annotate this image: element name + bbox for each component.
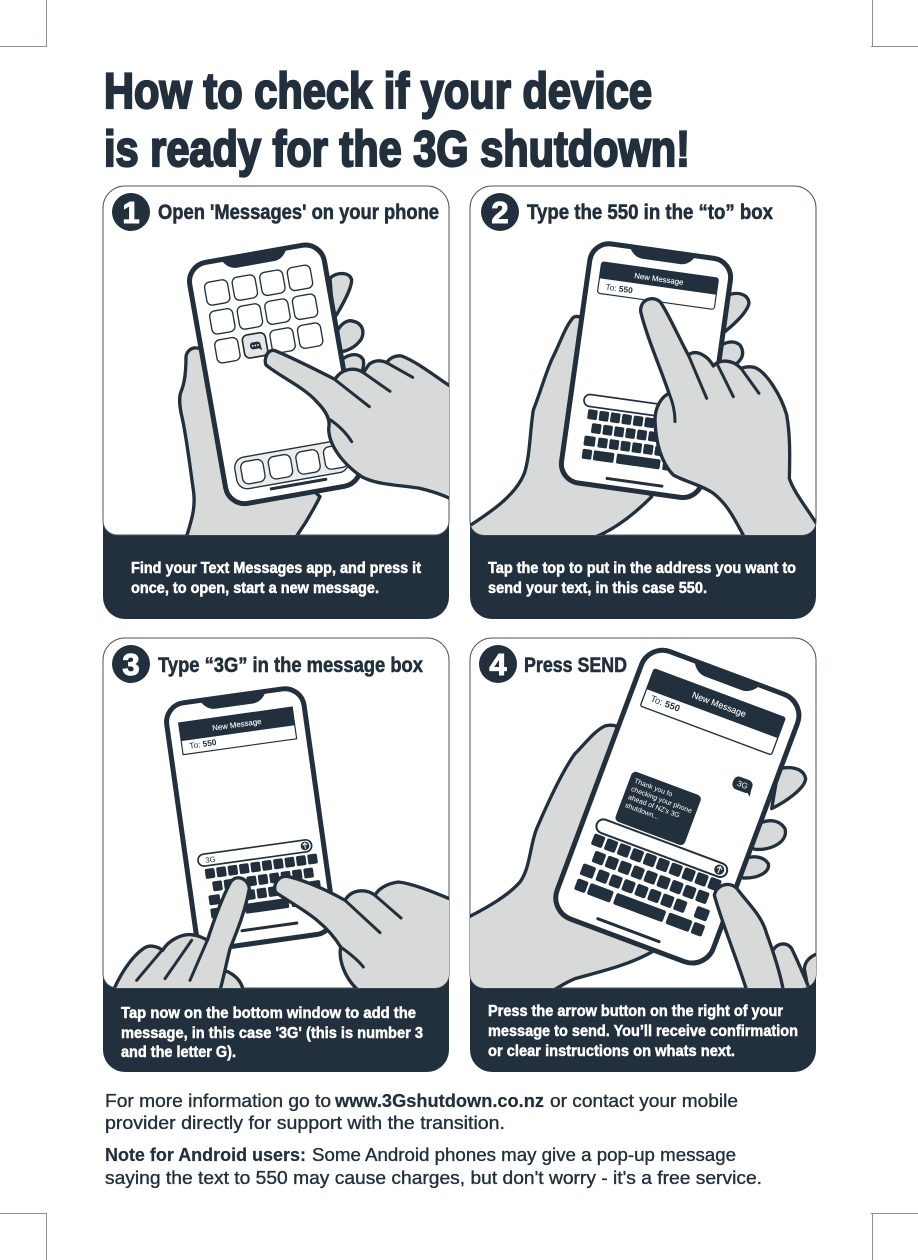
reply bubble: ahead of NZ's 3G	[627, 794, 680, 820]
step 4 description: or clear instructions on whats next.	[488, 1043, 735, 1060]
reply bubble: Thank you fo	[633, 778, 673, 799]
step 3 description	[121, 1005, 423, 1061]
panel: step 3	[103, 638, 453, 1072]
illustration: finger tapping to field	[468, 241, 818, 538]
step 2 number badge	[481, 193, 519, 231]
step 2 description: Tap the top to put in the address you want to	[488, 560, 796, 577]
illustration: hand tapping messages app	[180, 242, 453, 538]
left typing hand	[113, 878, 249, 990]
step 3 description: Tap now on the bottom window to add the	[121, 1005, 416, 1022]
illustration: pressing send	[467, 644, 818, 990]
reply bubble: checking your phone	[630, 786, 693, 815]
footer: note for Android users	[105, 1144, 762, 1188]
app dock	[233, 439, 350, 490]
reply bubble: shutdown...	[624, 802, 660, 821]
illustration: typing 3G	[113, 686, 453, 990]
step 2 number badge: 2	[491, 195, 509, 230]
to field: To: 550	[649, 694, 681, 714]
to field: New Message	[212, 717, 262, 733]
step 4 description	[488, 1003, 798, 1060]
step 2 description	[488, 560, 796, 597]
step 1 number badge	[112, 193, 150, 231]
to field	[640, 669, 785, 755]
to field: To: 550	[189, 737, 217, 751]
step 3 description: message, in this case '3G' (this is number 3	[121, 1025, 423, 1042]
to field: To: 550	[605, 282, 634, 295]
sent 3G bubble: 3G	[736, 779, 749, 791]
panel: step 1	[103, 186, 453, 619]
title	[104, 63, 690, 177]
step 3 number badge: 3	[122, 647, 140, 682]
message input with 3G	[197, 839, 312, 867]
panel 1 white card	[103, 186, 449, 535]
step 1 description: once, to open, start a new message.	[131, 580, 379, 597]
to field	[597, 262, 719, 310]
step 2 description: send your text, in this case 550.	[488, 580, 707, 597]
footer: more information: or contact your mobile	[550, 1090, 738, 1111]
step 4 number badge	[479, 645, 517, 683]
footer: note for Android users: saying the text to 550 may cause charges, but don't worry - it's a free service.	[105, 1167, 762, 1188]
footer: note for Android users: Note for Android users:	[105, 1144, 306, 1165]
message input with send arrow	[594, 817, 729, 879]
step 4 description: message to send. You’ll receive confirmation	[488, 1023, 798, 1040]
panel 4 background	[470, 638, 816, 1072]
holding hand	[467, 725, 806, 990]
panel 3 background	[103, 638, 449, 1072]
phone	[186, 242, 364, 507]
step 1 description	[131, 560, 421, 597]
right typing hand	[275, 876, 453, 990]
tapping hand	[265, 350, 453, 500]
footer: more information: www.3Gshutdown.co.nz	[334, 1090, 544, 1111]
to field	[179, 707, 297, 755]
pressing hand	[714, 884, 818, 990]
sent 3G bubble	[732, 776, 753, 797]
panel 2 background	[470, 186, 816, 619]
message input with 3G: 3G	[205, 855, 216, 865]
step 3 description: and the letter G).	[121, 1044, 236, 1061]
phone	[559, 241, 733, 500]
title: How to check if your device	[104, 63, 652, 119]
phone	[164, 686, 336, 951]
step 4 number badge: 4	[489, 647, 507, 682]
step 4 description: Press the arrow button on the right of your	[488, 1003, 783, 1020]
step 3 number badge	[112, 645, 150, 683]
step 1 heading: Open 'Messages' on your phone	[158, 201, 439, 224]
panel 3 white card	[103, 638, 449, 988]
title: is ready for the 3G shutdown!	[104, 121, 690, 177]
panel 4 white card	[470, 638, 816, 988]
to field: New Message	[691, 690, 748, 719]
footer: note for Android users: Some Android phones may give a pop-up message	[312, 1144, 736, 1165]
icon: messages app	[241, 332, 269, 359]
footer: more information: provider directly for support with the transition.	[105, 1112, 505, 1133]
step 2 heading: Type the 550 in the “to” box	[527, 201, 773, 224]
holding hand	[180, 274, 364, 538]
step 4 heading: Press SEND	[524, 654, 627, 677]
phone	[549, 644, 805, 969]
footer: more information: For more information go to	[105, 1090, 331, 1111]
panel 1 background	[103, 186, 449, 619]
step 1 number badge: 1	[122, 195, 140, 230]
step 3 heading: Type “3G” in the message box	[158, 654, 423, 677]
to field: New Message	[634, 271, 684, 287]
tapping hand	[641, 299, 818, 538]
step 1 description: Find your Text Messages app, and press it	[131, 560, 421, 577]
panel: step 4	[467, 638, 818, 1072]
holding hand	[468, 293, 749, 538]
reply bubble	[614, 770, 702, 846]
footer: more information	[105, 1090, 738, 1133]
panel 2 white card	[470, 186, 816, 535]
panel: step 2	[468, 186, 818, 619]
